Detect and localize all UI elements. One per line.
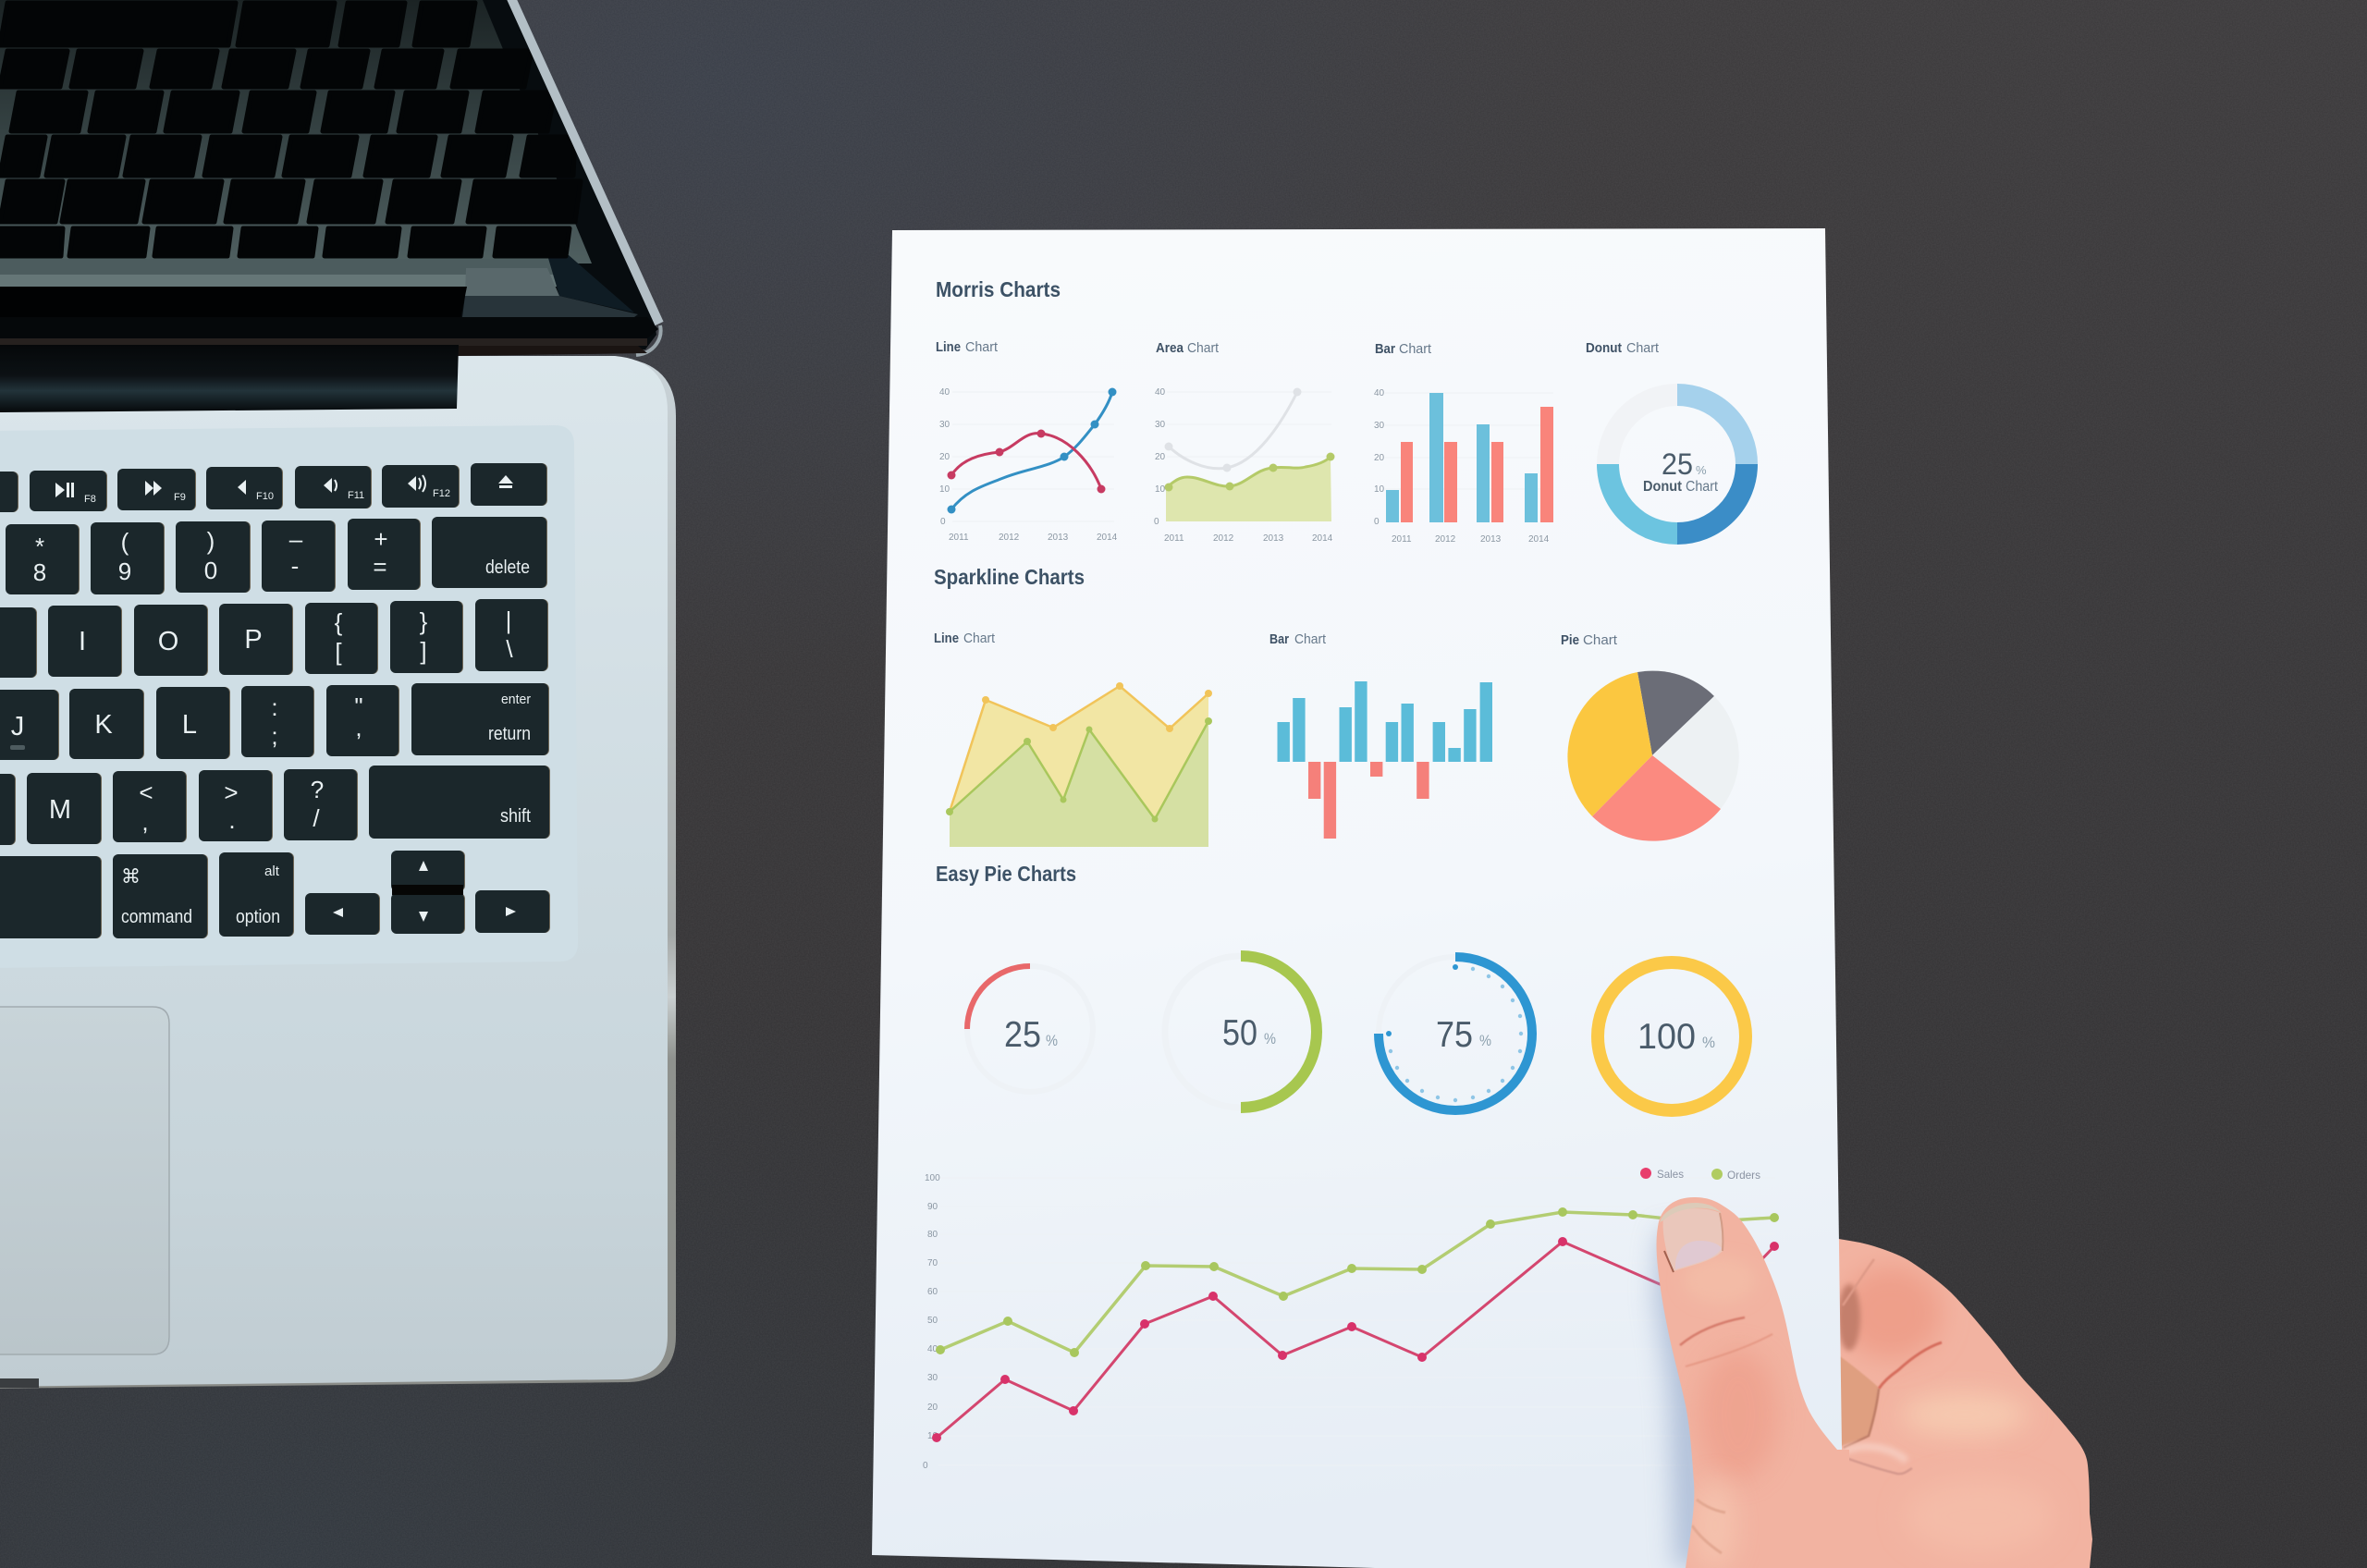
morris bar chart: 10 <box>1374 484 1385 495</box>
donut chart: % <box>1696 463 1707 477</box>
y axis labels: 70 <box>927 1258 938 1268</box>
subheading: Area Chart: Chart <box>1187 340 1220 356</box>
key legends: F8 <box>84 494 96 505</box>
key legends: enter <box>501 692 531 707</box>
morris area chart: 10 <box>1155 484 1166 495</box>
subheading: Pie Chart: Chart <box>1583 632 1618 648</box>
pie chart <box>1567 671 1739 841</box>
key legends: < <box>139 778 153 806</box>
heading: Easy Pie Charts: Easy Pie Charts <box>936 862 1076 886</box>
morris line chart: 10 <box>939 484 950 495</box>
subheading: Pie Chart: Pie <box>1561 632 1579 648</box>
morris bar chart <box>1374 388 1553 545</box>
key legends: , <box>141 808 149 836</box>
subheading: Bar Chart: Bar <box>1375 341 1395 357</box>
key legends: K <box>94 710 113 740</box>
y axis labels: 20 <box>927 1403 938 1413</box>
morris line chart: 0 <box>940 517 946 527</box>
morris line chart: 20 <box>939 452 950 462</box>
morris area chart <box>1154 387 1335 544</box>
legend: Orders <box>1727 1169 1760 1182</box>
morris line chart: 2013 <box>1048 533 1069 543</box>
morris bar chart: 20 <box>1374 453 1385 463</box>
key legends: F12 <box>433 488 450 499</box>
orders line <box>936 1207 1779 1357</box>
key legends: – <box>289 525 303 553</box>
donut chart: 25 <box>1662 447 1693 481</box>
morris bar chart: 2011 <box>1392 534 1412 545</box>
key legends: * <box>35 533 44 560</box>
easy pie 100%: % <box>1702 1034 1715 1051</box>
donut chart: Donut <box>1643 479 1683 495</box>
subheading: sparkline Bar Chart: Bar <box>1269 631 1289 647</box>
morris line chart: 40 <box>939 387 950 398</box>
subheading: Line Chart: Chart <box>965 339 999 355</box>
morris area chart: 2013 <box>1263 533 1284 544</box>
y axis labels: 30 <box>927 1373 938 1383</box>
morris bar chart: 40 <box>1374 388 1385 398</box>
easy pie 75%: 75 <box>1436 1015 1473 1055</box>
morris line chart: 30 <box>939 420 950 430</box>
legend: Sales <box>1657 1168 1684 1181</box>
morris area chart: 2012 <box>1213 533 1234 544</box>
key legends: = <box>373 553 387 581</box>
y axis labels: 0 <box>923 1461 928 1471</box>
key legends: I <box>79 627 86 656</box>
morris line chart: 2011 <box>949 533 969 543</box>
heading: Sparkline Charts: Sparkline Charts <box>934 565 1085 589</box>
key legends: option <box>236 907 280 927</box>
sparkline bar chart <box>1278 681 1492 839</box>
easy pie 50%: 50 <box>1222 1013 1257 1053</box>
hand shading and folds <box>1840 1258 2029 1535</box>
key legends: 9 <box>118 557 131 585</box>
morris line chart: 2012 <box>999 533 1020 543</box>
key legends: ⌘ <box>121 865 141 888</box>
key legends: M <box>49 795 71 825</box>
subheading: Line Chart: Line <box>936 339 961 355</box>
morris bar chart: 30 <box>1374 421 1385 431</box>
key legends: O <box>158 627 178 656</box>
hinge bar <box>0 338 647 412</box>
subheading: Area Chart: Area <box>1156 340 1184 356</box>
key caps <box>0 463 549 938</box>
key legends: L <box>182 710 197 740</box>
subheading: Donut Chart: Donut <box>1586 340 1622 356</box>
morris area chart: 2014 <box>1312 533 1333 544</box>
key legends: - <box>291 552 299 580</box>
trackpad <box>0 1007 169 1354</box>
thumb and palm holding the paper <box>1657 1197 1849 1568</box>
key legends: { <box>335 608 343 636</box>
key legends: ) <box>207 527 215 555</box>
key legends: , <box>355 714 362 741</box>
key legends: " <box>354 692 363 720</box>
key legends: ; <box>271 722 278 750</box>
key legends: + <box>374 525 388 553</box>
key legends: 0 <box>204 557 217 584</box>
donut chart <box>1608 395 1747 533</box>
legend <box>1640 1168 1760 1182</box>
subheading: sparkline Line Chart: Line <box>934 631 959 646</box>
key legends: ? <box>311 776 324 803</box>
donut chart: Chart <box>1686 479 1718 495</box>
key legends: shift <box>500 806 531 827</box>
key legends: delete <box>485 557 530 578</box>
subheading: sparkline Line Chart: Chart <box>963 631 996 646</box>
morris line chart: 2014 <box>1097 533 1118 543</box>
thumb shading <box>1692 1352 1777 1562</box>
y axis labels: 40 <box>927 1344 938 1354</box>
y axis labels: 80 <box>927 1230 938 1240</box>
morris area chart: 2011 <box>1164 533 1184 544</box>
key legends: ] <box>420 637 427 665</box>
y axis labels: 10 <box>927 1431 938 1441</box>
easy pie 25% <box>967 966 1093 1092</box>
key legends: alt <box>264 864 280 879</box>
key legends: return <box>488 724 531 744</box>
subheading: Bar Chart: Chart <box>1399 341 1432 357</box>
key legends: ( <box>121 528 129 556</box>
easy pie 100%: 100 <box>1637 1017 1696 1057</box>
morris bar chart: 2013 <box>1480 534 1502 545</box>
easy pie 75%: % <box>1479 1032 1491 1049</box>
subheading: sparkline Bar Chart: Chart <box>1294 631 1327 647</box>
key legends: [ <box>335 638 342 666</box>
laptop lid and screen <box>0 0 661 355</box>
key legends: . <box>228 806 236 834</box>
key legends: / <box>313 804 320 832</box>
large sales and orders line chart <box>923 1168 1779 1471</box>
easy pie 25%: 25 <box>1004 1015 1041 1055</box>
key legends: command <box>121 907 192 927</box>
subheading: Donut Chart: Chart <box>1626 340 1660 356</box>
laptop body <box>0 356 676 1389</box>
laptop <box>0 0 676 1389</box>
easy pie 50% <box>1165 956 1317 1108</box>
morris bar chart: 0 <box>1374 517 1380 527</box>
key legends: > <box>224 778 239 806</box>
y axis labels: 50 <box>927 1316 938 1326</box>
easy pie 100% <box>1598 962 1746 1110</box>
thumbnail <box>1660 1203 1723 1272</box>
key legends: J <box>11 712 24 741</box>
morris area chart: 20 <box>1155 452 1166 462</box>
y axis labels: 100 <box>925 1173 940 1183</box>
key legends: } <box>420 607 428 635</box>
hand behind the paper <box>1838 1239 2092 1568</box>
easy pie 25%: % <box>1046 1032 1058 1049</box>
morris line chart <box>939 387 1118 543</box>
keyboard reflection in the screen <box>0 3 581 256</box>
key legends: P <box>244 625 263 655</box>
key legends <box>10 475 531 927</box>
y axis labels <box>923 1173 940 1471</box>
key legends: \ <box>506 635 513 663</box>
key legends: | <box>506 606 511 634</box>
keyboard well <box>0 425 578 968</box>
morris area chart: 0 <box>1154 517 1159 527</box>
morris area chart: 40 <box>1155 387 1166 398</box>
key legends: F10 <box>256 491 274 502</box>
thumb knuckle creases <box>1680 1317 1772 1366</box>
sales line <box>932 1237 1779 1442</box>
y axis labels: 60 <box>927 1287 938 1297</box>
heading: Morris Charts: Morris Charts <box>936 277 1061 301</box>
thumb shadow on paper <box>1655 1230 1711 1568</box>
morris area chart: 30 <box>1155 420 1166 430</box>
y axis labels: 90 <box>927 1202 938 1212</box>
morris bar chart: 2014 <box>1528 534 1550 545</box>
keyboard <box>0 463 549 938</box>
key legends: 8 <box>33 558 46 586</box>
sparkline area chart <box>946 682 1212 847</box>
key legends: F9 <box>174 492 186 503</box>
key legends: : <box>271 693 278 721</box>
paper sheet <box>872 228 1842 1568</box>
easy pie 75% <box>1379 957 1532 1110</box>
key legends: F11 <box>348 490 364 501</box>
morris bar chart: 2012 <box>1435 534 1456 545</box>
easy pie 50%: % <box>1264 1030 1276 1047</box>
